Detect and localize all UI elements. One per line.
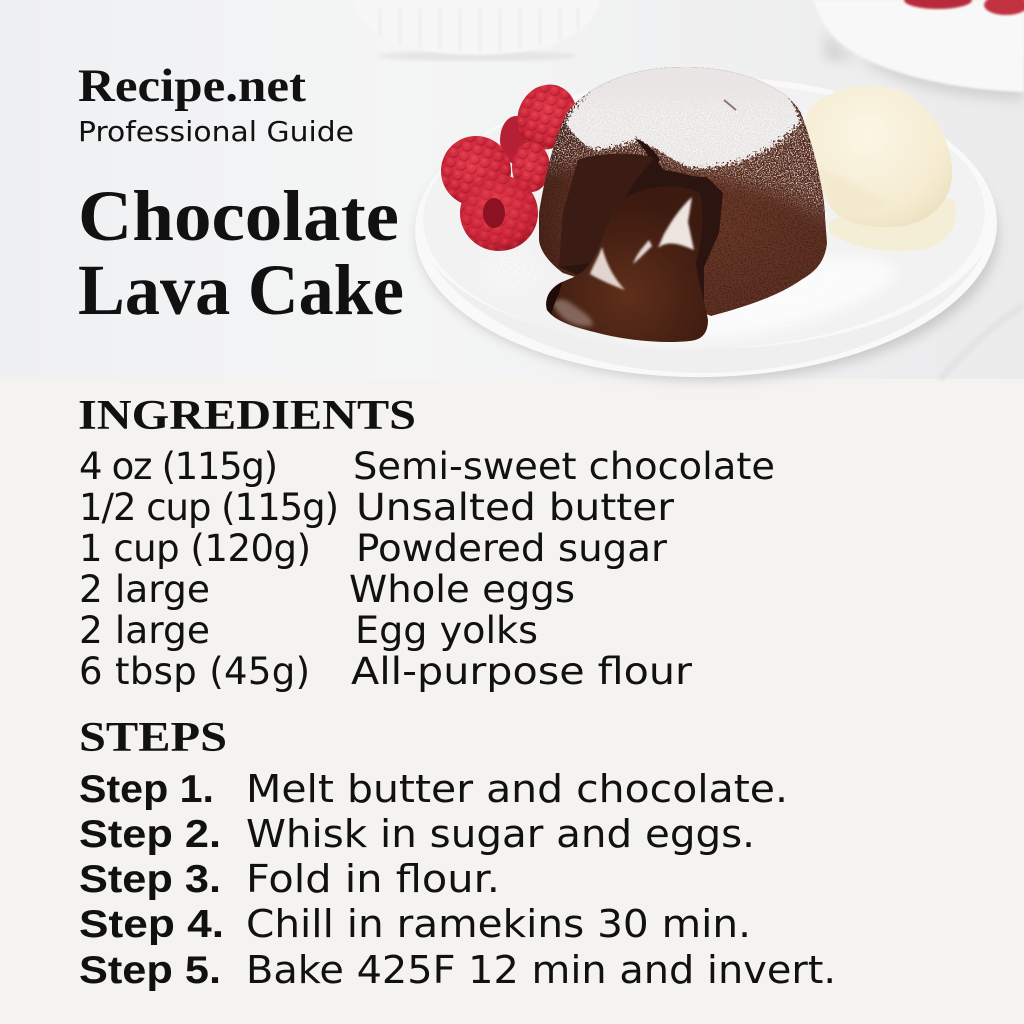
step list: Fold in flour. (246, 857, 500, 901)
icon: raspberries (441, 84, 575, 251)
ice cream scoop (806, 85, 956, 251)
ingredient list: All-purpose flour (351, 650, 693, 693)
brand heading: Recipe.net (78, 60, 306, 112)
ingredient list: Whole eggs (349, 568, 575, 611)
crack in the top (634, 138, 660, 168)
icon: blurred white ramekin (352, 0, 600, 61)
ingredient list: Egg yolks (355, 609, 538, 652)
panel: ingredients (78, 393, 775, 693)
step list: Step 1. (79, 768, 214, 811)
ingredient list: 2 large (79, 568, 210, 611)
powdered sugar on cake top (538, 60, 830, 220)
ingredient list: Powdered sugar (356, 527, 668, 570)
step list: Step 4. (79, 903, 224, 946)
ingredient list: Unsalted butter (356, 486, 675, 529)
brand heading (78, 60, 354, 148)
recipe title: Lava Cake (78, 250, 404, 330)
recipe title: Chocolate (78, 176, 399, 256)
step list: Melt butter and chocolate. (246, 767, 788, 811)
ingredient list (79, 445, 775, 693)
recipe title (78, 176, 404, 330)
ingredient list: 1 cup (120g) (79, 527, 311, 570)
chocolate cake (530, 60, 840, 342)
step list: Step 3. (79, 858, 221, 901)
ingredient list: 4 oz (115g) (79, 445, 278, 488)
icon: blurred bowl of raspberries (813, 0, 1024, 100)
ingredient list: Semi-sweet chocolate (353, 445, 775, 488)
ingredient list: 2 large (79, 609, 210, 652)
panel: steps (79, 715, 836, 992)
step list: Step 2. (79, 813, 221, 856)
ingredients heading: INGREDIENTS (78, 393, 416, 439)
step list (79, 767, 836, 992)
powdered sugar on plate (711, 237, 889, 353)
plate (412, 72, 1000, 382)
lava highlights (658, 197, 694, 250)
step list: Step 5. (79, 949, 221, 992)
ingredient list: 1/2 cup (115g) (79, 486, 339, 529)
step list: Whisk in sugar and eggs. (246, 812, 755, 856)
step list: Bake 425F 12 min and invert. (246, 948, 836, 992)
cake opening (559, 154, 723, 313)
hero photo: lava cake on plate (383, 0, 1024, 385)
step list: Chill in ramekins 30 min. (246, 902, 751, 946)
ingredient list: 6 tbsp (45g) (79, 650, 310, 693)
steps heading: STEPS (79, 715, 227, 761)
brand subtitle: Professional Guide (78, 115, 354, 148)
molten chocolate (546, 186, 708, 342)
